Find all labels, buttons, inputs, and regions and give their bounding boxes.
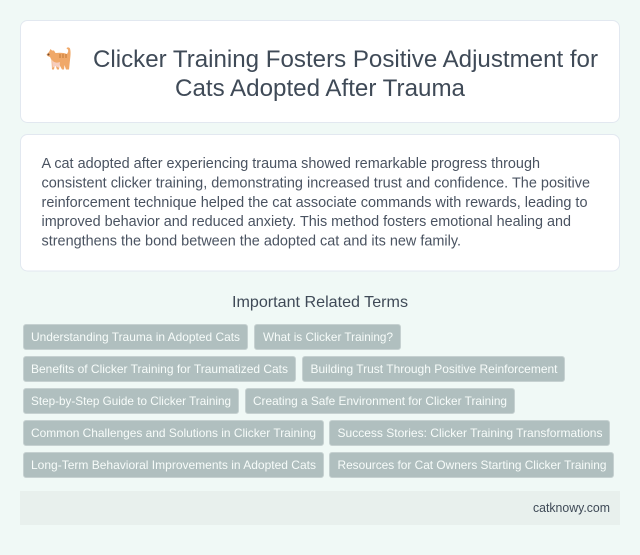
tag: [24, 324, 248, 350]
tag: Success Stories: Clicker Training Transformations: [338, 426, 602, 440]
tag: Common Challenges and Solutions in Clicker Training: [31, 426, 316, 440]
tag: Understanding Trauma in Adopted Cats: [31, 330, 240, 344]
tag: [246, 388, 514, 414]
heading: related terms: Important Related Terms: [232, 294, 408, 311]
tag: Building Trust Through Positive Reinforcement: [310, 362, 558, 376]
tag list: [24, 324, 614, 478]
tag: [24, 388, 238, 414]
text block: description: consistent clicker training, demonstrating increased trust and confidence. The positive: [42, 175, 590, 191]
footer: [20, 491, 620, 525]
footer: catknowy.com: [533, 501, 610, 515]
title: Cats Adopted After Trauma: [175, 75, 466, 102]
title: Clicker Training Fosters Positive Adjustment for: [93, 46, 598, 73]
text block: description: reinforcement technique helped the cat associate commands with rewards, leading to: [42, 195, 588, 211]
icon: cat: [46, 47, 71, 70]
tag: [330, 420, 610, 446]
title: [93, 46, 598, 102]
text block: description: improved behavior and reduced anxiety. This method fosters emotional healing and: [42, 214, 571, 230]
tag: [24, 452, 324, 478]
tag: Resources for Cat Owners Starting Clicker Training: [338, 458, 606, 472]
tag: [24, 420, 324, 446]
tag: Benefits of Clicker Training for Traumatized Cats: [31, 362, 288, 376]
tag: Creating a Safe Environment for Clicker Training: [253, 394, 507, 408]
text block: description: [42, 156, 590, 250]
panel: title card: [20, 20, 620, 122]
tag: [254, 324, 400, 350]
text block: description: strengthens the bond between the adopted cat and its new family.: [42, 234, 461, 250]
tag: [302, 356, 564, 382]
tag: Long-Term Behavioral Improvements in Adopted Cats: [31, 458, 316, 472]
tag: What is Clicker Training?: [263, 330, 393, 344]
tag: Step-by-Step Guide to Clicker Training: [31, 394, 231, 408]
tag: [24, 356, 296, 382]
text block: description: A cat adopted after experiencing trauma showed remarkable progress through: [42, 156, 540, 172]
tag: [330, 452, 614, 478]
panel: description card: [20, 134, 620, 271]
